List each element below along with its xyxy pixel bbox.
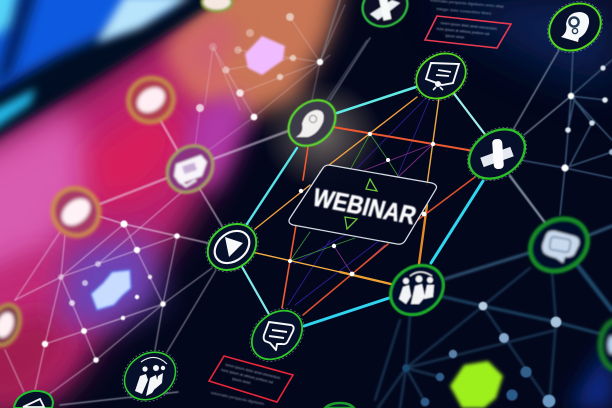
node: monitor icon [158, 136, 222, 202]
card arrow down [345, 217, 357, 229]
node: play [196, 212, 268, 282]
callout: bottom red box: ipsum amet [232, 377, 251, 385]
node: blurred right edge [600, 320, 612, 370]
node: people small [112, 340, 188, 408]
callout: top red box: ipsum amet [445, 34, 464, 40]
node: chat blurred right [521, 208, 597, 282]
node: chat [239, 298, 315, 372]
node: top partial icon [356, 0, 414, 34]
callout: top red box: nunc ipsum at ultrices pretium est [436, 27, 490, 36]
mesh junction dots [288, 132, 435, 276]
network dots: right side [402, 65, 612, 407]
network dots: left side [42, 13, 323, 363]
callout: bottom red box: lorem ipsum dolor amet elementum [225, 363, 281, 380]
callout: bottom red box [209, 356, 293, 402]
callout: top red box: lorem ipsum dolor amet elementum [441, 21, 497, 31]
node: brain gear [538, 0, 612, 63]
blurred hexagon: lime [450, 361, 503, 408]
node: blurred edge left [0, 300, 25, 350]
card title: WEBINAR [309, 185, 419, 230]
cyan hexagon ring [241, 87, 487, 326]
webinar card [289, 165, 436, 244]
node: bottom-left partial [14, 391, 53, 408]
top text block: integer dolor consectetur libero [436, 6, 492, 16]
node: certificate [405, 42, 477, 110]
top text block [429, 0, 505, 17]
blurred hexagon: pink [245, 36, 285, 75]
node: brain [279, 91, 345, 155]
node: blurred orange ring top [120, 69, 182, 131]
node: top-left blurred [202, 0, 232, 11]
callout: top red box [425, 16, 511, 48]
network: defocused left side [5, 0, 370, 405]
node: bandage [457, 116, 537, 192]
network: defocused right side [510, 50, 612, 224]
card arrow up [366, 179, 377, 191]
bottom text block: informatio perspecta dignissim [211, 390, 265, 406]
callout: bottom red box: nunc ipsum at ultrices pretium est [221, 368, 274, 385]
coloured inner mesh around the webinar card [252, 97, 475, 315]
node: blurred orange ring left [44, 180, 108, 244]
node: people main [381, 255, 453, 325]
blurred hexagon: blue [91, 270, 131, 310]
node: bottom edge partial [325, 403, 354, 408]
